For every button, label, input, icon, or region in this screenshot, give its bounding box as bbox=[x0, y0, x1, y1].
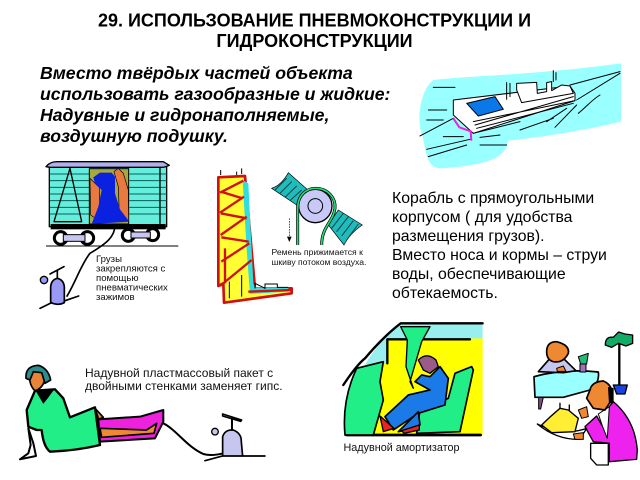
illustration: woman with inflatable cast bbox=[20, 365, 265, 461]
cast caption bbox=[85, 366, 283, 393]
belt caption bbox=[272, 247, 366, 267]
boxcar caption: помощью bbox=[96, 273, 139, 284]
illustration: boxcar with pneumatic clamps bbox=[40, 162, 178, 308]
intro text block: воздушную подушку. bbox=[40, 126, 228, 146]
patient figure bbox=[20, 365, 100, 459]
cast caption: Надувной пластмассовый пакет с bbox=[85, 366, 273, 380]
potted plant bbox=[605, 332, 633, 394]
legs bbox=[95, 408, 157, 437]
intro text block: Вместо твёрдых частей объекта bbox=[40, 63, 353, 83]
pump bbox=[40, 267, 79, 308]
title bbox=[98, 10, 531, 51]
ship description text: корпусом ( для удобства bbox=[392, 209, 573, 226]
boxcar caption: Грузы bbox=[96, 254, 122, 265]
boxcar caption bbox=[96, 254, 168, 303]
title: ГИДРОКОНСТРУКЦИИ bbox=[216, 31, 413, 51]
illustration: restaurant diners bbox=[534, 332, 637, 465]
ship description text: Вместо носа и кормы – струи bbox=[392, 247, 607, 264]
title: 29. ИСПОЛЬЗОВАНИЕ ПНЕВМОКОНСТРУКЦИИ И bbox=[98, 10, 531, 30]
cast caption: двойными стенками заменяет гипс. bbox=[85, 379, 283, 393]
passenger bbox=[380, 356, 448, 433]
hose bbox=[163, 423, 223, 455]
illustration: ship on water bbox=[419, 63, 621, 168]
inflated airbag bbox=[401, 327, 430, 388]
illustration: inflatable shock absorber in car bbox=[343, 323, 483, 435]
boxcar caption: закрепляются с bbox=[96, 264, 166, 274]
boxcar caption: зажимов bbox=[96, 292, 135, 303]
intro text block bbox=[40, 63, 390, 146]
wagon body bbox=[46, 162, 169, 229]
waiter with food bbox=[537, 381, 637, 465]
illustration: inflatable structure wall bbox=[218, 168, 292, 303]
belt caption: Ремень прижимается к bbox=[272, 247, 363, 257]
boxcar caption: пневматических bbox=[96, 282, 168, 294]
ship description text: размещения грузов). bbox=[392, 228, 545, 245]
ship description text: обтекаемость. bbox=[392, 285, 498, 302]
intro text block: Надувные и гидронаполняемые, bbox=[40, 105, 329, 125]
table bbox=[534, 353, 599, 409]
hose bbox=[67, 225, 115, 297]
wheels and rail bbox=[46, 229, 178, 246]
shock absorber caption: Надувной амортизатор bbox=[344, 442, 459, 454]
seated man bbox=[538, 342, 576, 373]
belt caption: шкиву потоком воздуха. bbox=[272, 257, 366, 267]
ship description text: Корабль с прямоугольными bbox=[392, 190, 594, 207]
illustration: belt on pulley bbox=[272, 173, 362, 245]
pump bbox=[205, 414, 265, 461]
inflatable bag bbox=[98, 410, 163, 442]
ship description text: воды, обеспечивающие bbox=[392, 266, 566, 283]
ship description text bbox=[392, 190, 607, 302]
intro text block: использовать газообразные и жидкие: bbox=[40, 84, 390, 104]
